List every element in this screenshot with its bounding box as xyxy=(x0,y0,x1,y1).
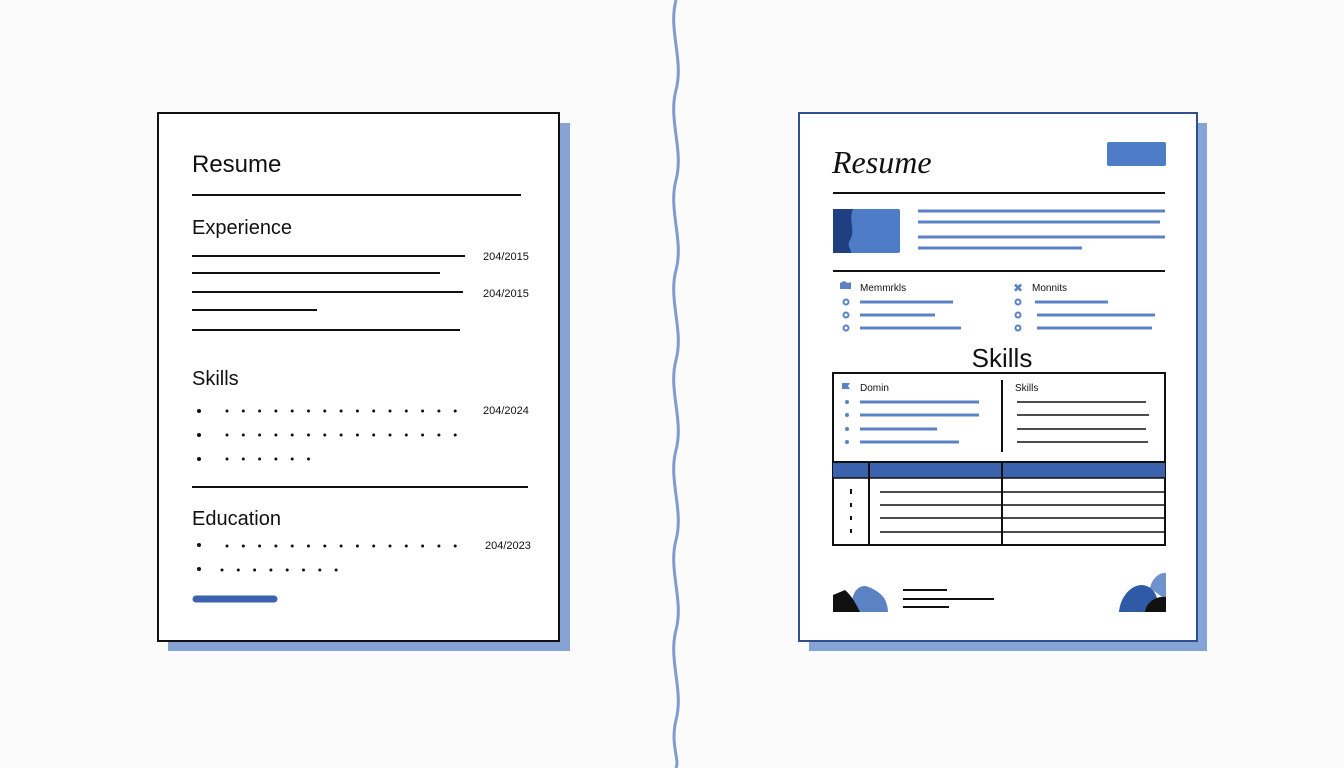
list: Memmrkls xyxy=(840,281,961,330)
skills table: Domin xyxy=(860,383,889,394)
list: Monnits xyxy=(1013,281,1155,330)
panel: plain resume xyxy=(158,113,570,651)
section: experience: 204/2015 xyxy=(483,288,529,300)
section: education: 204/2023 xyxy=(485,540,531,552)
list: Memmrkls: Memmrkls xyxy=(860,283,906,294)
section: skills: 204/2024 xyxy=(483,405,529,417)
intro lines xyxy=(918,211,1165,248)
panel: designed resume xyxy=(799,113,1207,651)
heading: script Resume: Resume xyxy=(831,144,932,180)
wavy divider xyxy=(674,0,678,768)
skills table: Skills xyxy=(1015,383,1038,394)
section: skills: Skills xyxy=(192,368,239,390)
list: Monnits: Monnits xyxy=(1032,283,1067,294)
section: experience: 204/2015 xyxy=(483,251,529,263)
footer graphic right xyxy=(1119,573,1166,612)
section: education xyxy=(192,508,531,571)
heading: Skills: Skills xyxy=(972,343,1032,373)
photo block xyxy=(833,209,900,253)
list: Monnits: ✖ xyxy=(1013,281,1023,295)
section: experience xyxy=(192,217,529,330)
section: education: Education xyxy=(192,508,281,530)
section: skills xyxy=(192,368,529,461)
footer lines xyxy=(903,590,994,607)
skills table xyxy=(833,373,1165,545)
footer graphic left xyxy=(833,586,888,612)
section: experience: Experience xyxy=(192,217,292,239)
blue button xyxy=(1107,142,1166,166)
heading: Resume: Resume xyxy=(192,151,281,178)
blue bar xyxy=(196,596,274,602)
